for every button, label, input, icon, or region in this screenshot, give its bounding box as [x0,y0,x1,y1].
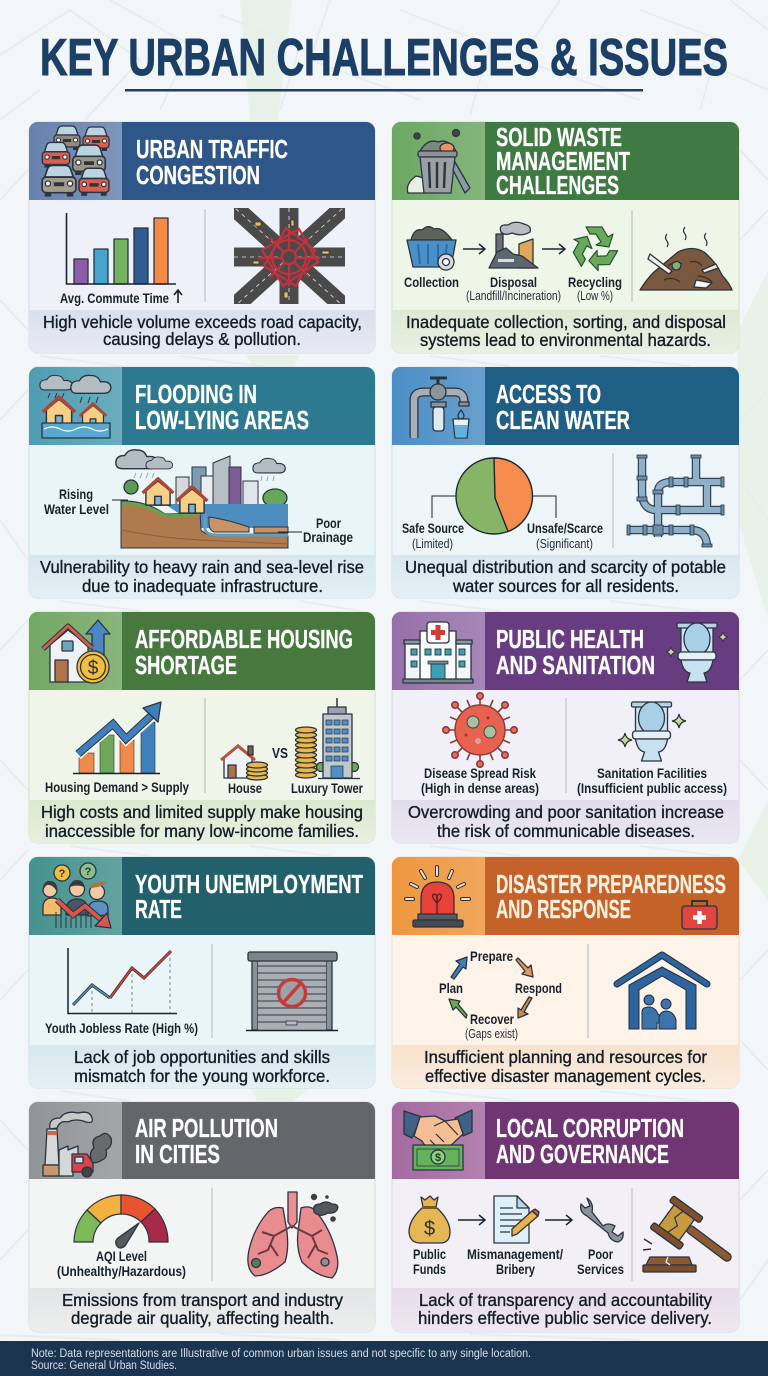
caption: degrade air quality, affecting health. [71,1308,334,1328]
caption [418,1290,712,1328]
gauge: AQI level: AQI Level [96,1248,147,1264]
caption: causing delays & pollution. [103,329,301,349]
icon: house versus luxury tower: House [228,780,262,796]
icon: sanitation facilities toilet [577,702,727,796]
caption [40,557,364,596]
caption: hinders effective public service delivery. [418,1308,712,1328]
pie chart: safe vs unsafe water: Safe Source [402,520,464,536]
flow: public funds to poor services: Bribery [496,1261,535,1277]
caption: High costs and limited supply make housing [41,802,363,822]
panel: solid waste management [392,122,739,353]
heading [135,1115,278,1169]
caption: effective disaster management cycles. [425,1066,706,1086]
gauge: AQI level [57,1195,186,1279]
panel: local corruption and governance [392,1102,739,1332]
heading [496,1115,684,1169]
bar chart: average commute time [60,213,182,306]
caption: High vehicle volume exceeds road capacity, [43,312,362,332]
cycle diagram: disaster management: (Gaps exist) [465,1027,518,1041]
heading: LOW-LYING AREAS [135,407,309,435]
heading [496,626,655,680]
heading: AND GOVERNANCE [496,1141,669,1169]
icon: polluted lungs [248,1192,338,1278]
caption: the risk of communicable diseases. [437,821,695,841]
icon: house with rising price [43,620,110,683]
icon: house versus luxury tower: VS [272,745,288,762]
heading: CHALLENGES [496,172,619,200]
icon: house with rising price: $ [88,658,99,679]
caption [74,1047,330,1086]
flood cross-section diagram: Drainage [303,529,353,545]
cycle diagram: disaster management [439,948,562,1041]
bar chart: average commute time: Avg. Commute Time [60,290,169,306]
heading: CLEAN WATER [496,407,630,435]
icon: sanitation facilities toilet: Sanitation Facilities [597,765,707,781]
flow: public funds to poor services: Funds [413,1261,446,1277]
icon: virus: Disease Spread Risk [424,765,536,781]
heading [135,871,363,924]
caption: water sources for all residents. [452,576,679,596]
icon: house versus luxury tower: Luxury Tower [291,780,363,796]
icon: house versus luxury tower [221,698,363,796]
line chart: youth jobless rate [45,948,198,1036]
heading: AFFORDABLE HOUSING [135,626,353,654]
icon: hospital [403,622,473,683]
pie chart: safe vs unsafe water: (Limited) [412,537,453,551]
caption: Inadequate collection, sorting, and disposal [406,312,726,332]
heading: URBAN TRAFFIC [136,136,288,164]
heading: FLOODING IN [135,381,257,409]
caption: Overcrowding and poor sanitation increase [408,802,724,822]
heading: SOLID WASTE [496,124,622,152]
icon: water tap and filter [414,378,469,438]
chart: housing demand exceeds supply [45,702,189,795]
panel: disaster preparedness and response [392,857,739,1088]
caption: Vulnerability to heavy rain and sea-level rise [40,557,364,577]
heading [496,124,630,200]
panel: air pollution in cities [29,1102,375,1332]
caption: Lack of job opportunities and skills [74,1047,330,1067]
caption: mismatch for the young workforce. [74,1066,330,1086]
flood cross-section diagram: Rising [59,486,93,502]
cycle diagram: disaster management: Prepare [470,948,513,964]
icon: emergency siren [406,867,469,927]
heading: AND RESPONSE [496,896,631,924]
icon: flooded houses [40,375,111,438]
panel: urban traffic congestion [29,122,375,353]
footer note: Source: General Urban Studies. [31,1360,177,1372]
icon: virus: (High in dense areas) [421,780,539,796]
caption [406,312,726,350]
pie chart: safe vs unsafe water: Unsafe/Scarce [527,520,603,536]
waste flow diagram [404,222,622,303]
caption: Emissions from transport and industry [62,1290,343,1310]
waste flow diagram: Collection [404,274,459,290]
icon: handshake over money [404,1110,472,1170]
heading [496,381,630,435]
icon: virus [421,693,539,796]
flood cross-section diagram [44,450,353,548]
icon: broken gavel [643,1196,727,1272]
heading: CONGESTION [136,162,260,190]
heading: SHORTAGE [135,652,237,680]
cycle diagram: disaster management: Respond [515,980,562,996]
icon: unemployed youth with falling arrow: ? [85,866,92,878]
heading: AND SANITATION [496,652,655,680]
heading: MANAGEMENT [496,148,630,176]
caption: systems lead to environmental hazards. [420,330,711,350]
heading: YOUTH UNEMPLOYMENT [135,871,363,899]
flow: public funds to poor services: Mismanagement/ [467,1246,563,1262]
heading: RATE [135,896,182,924]
flow: public funds to poor services [409,1196,624,1277]
heading: AIR POLLUTION [135,1115,278,1143]
waste flow diagram: (Low %) [577,289,613,303]
gauge: AQI level: (Unhealthy/Hazardous) [57,1263,186,1279]
flow: public funds to poor services: Public [413,1246,446,1262]
flood cross-section diagram: Poor [316,515,341,531]
panel: youth unemployment rate [29,857,375,1088]
waste flow diagram: (Landfill/Incineration) [466,289,561,303]
waste flow diagram: Recycling [568,274,622,290]
chart: housing demand exceeds supply: Housing Demand > Supply [45,779,189,795]
icon: sanitation facilities toilet: (Insufficient public access) [577,780,727,796]
caption: Insufficient planning and resources for [424,1047,707,1067]
flow: public funds to poor services: $ [424,1218,435,1240]
waste flow diagram: Disposal [490,274,537,290]
caption: Lack of transparency and accountability [419,1290,712,1310]
heading [136,136,288,190]
caption [405,557,726,596]
panel: affordable housing shortage [29,612,375,843]
pie chart: safe vs unsafe water [402,458,603,551]
caption [62,1290,343,1328]
icon: unemployed youth with falling arrow: ? [59,868,66,880]
icon: garbage pile [640,227,732,290]
flow: public funds to poor services: Poor [588,1246,613,1262]
icon: pipe network [627,455,724,547]
caption [41,802,363,841]
icon: overflowing trash can [407,130,470,193]
caption [408,802,724,841]
icon: first aid kit [682,901,717,929]
icon: closed shop shutter [246,952,338,1030]
caption [43,312,362,349]
flow: public funds to poor services: Services [577,1261,624,1277]
flood cross-section diagram: Water Level [44,501,109,517]
icon: handshake over money: $ [435,1152,441,1164]
icon: unemployed youth with falling arrow [43,863,111,928]
icon: factory and truck emissions [43,1112,111,1177]
footer note [0,1341,768,1376]
panel: flooding in low-lying areas [29,367,375,598]
icon: shelter with people [617,955,707,1029]
caption [424,1047,707,1086]
cycle diagram: disaster management: Plan [439,980,463,996]
icon: congested intersection [234,208,345,304]
heading: LOCAL CORRUPTION [496,1115,684,1143]
heading: ACCESS TO [496,381,601,409]
heading [496,871,726,924]
caption: Unequal distribution and scarcity of potable [405,557,726,577]
panel: public health and sanitation [392,612,739,843]
panel: access to clean water [392,367,739,598]
line chart: youth jobless rate: Youth Jobless Rate (High %) [45,1020,198,1036]
pie chart: safe vs unsafe water: (Significant) [536,537,593,551]
icon: toilet in header [666,623,728,682]
icon: traffic jam cars [42,126,109,197]
heading: PUBLIC HEALTH [496,626,644,654]
heading [135,626,353,680]
cycle diagram: disaster management: Recover [470,1011,514,1027]
caption: inaccessible for many low-income families. [45,821,359,841]
footer note: Note: Data representations are Illustrative of common urban issues and not specific to any single location. [31,1348,531,1360]
heading [135,381,309,435]
heading: IN CITIES [135,1141,220,1169]
caption: due to inadequate infrastructure. [82,576,323,596]
